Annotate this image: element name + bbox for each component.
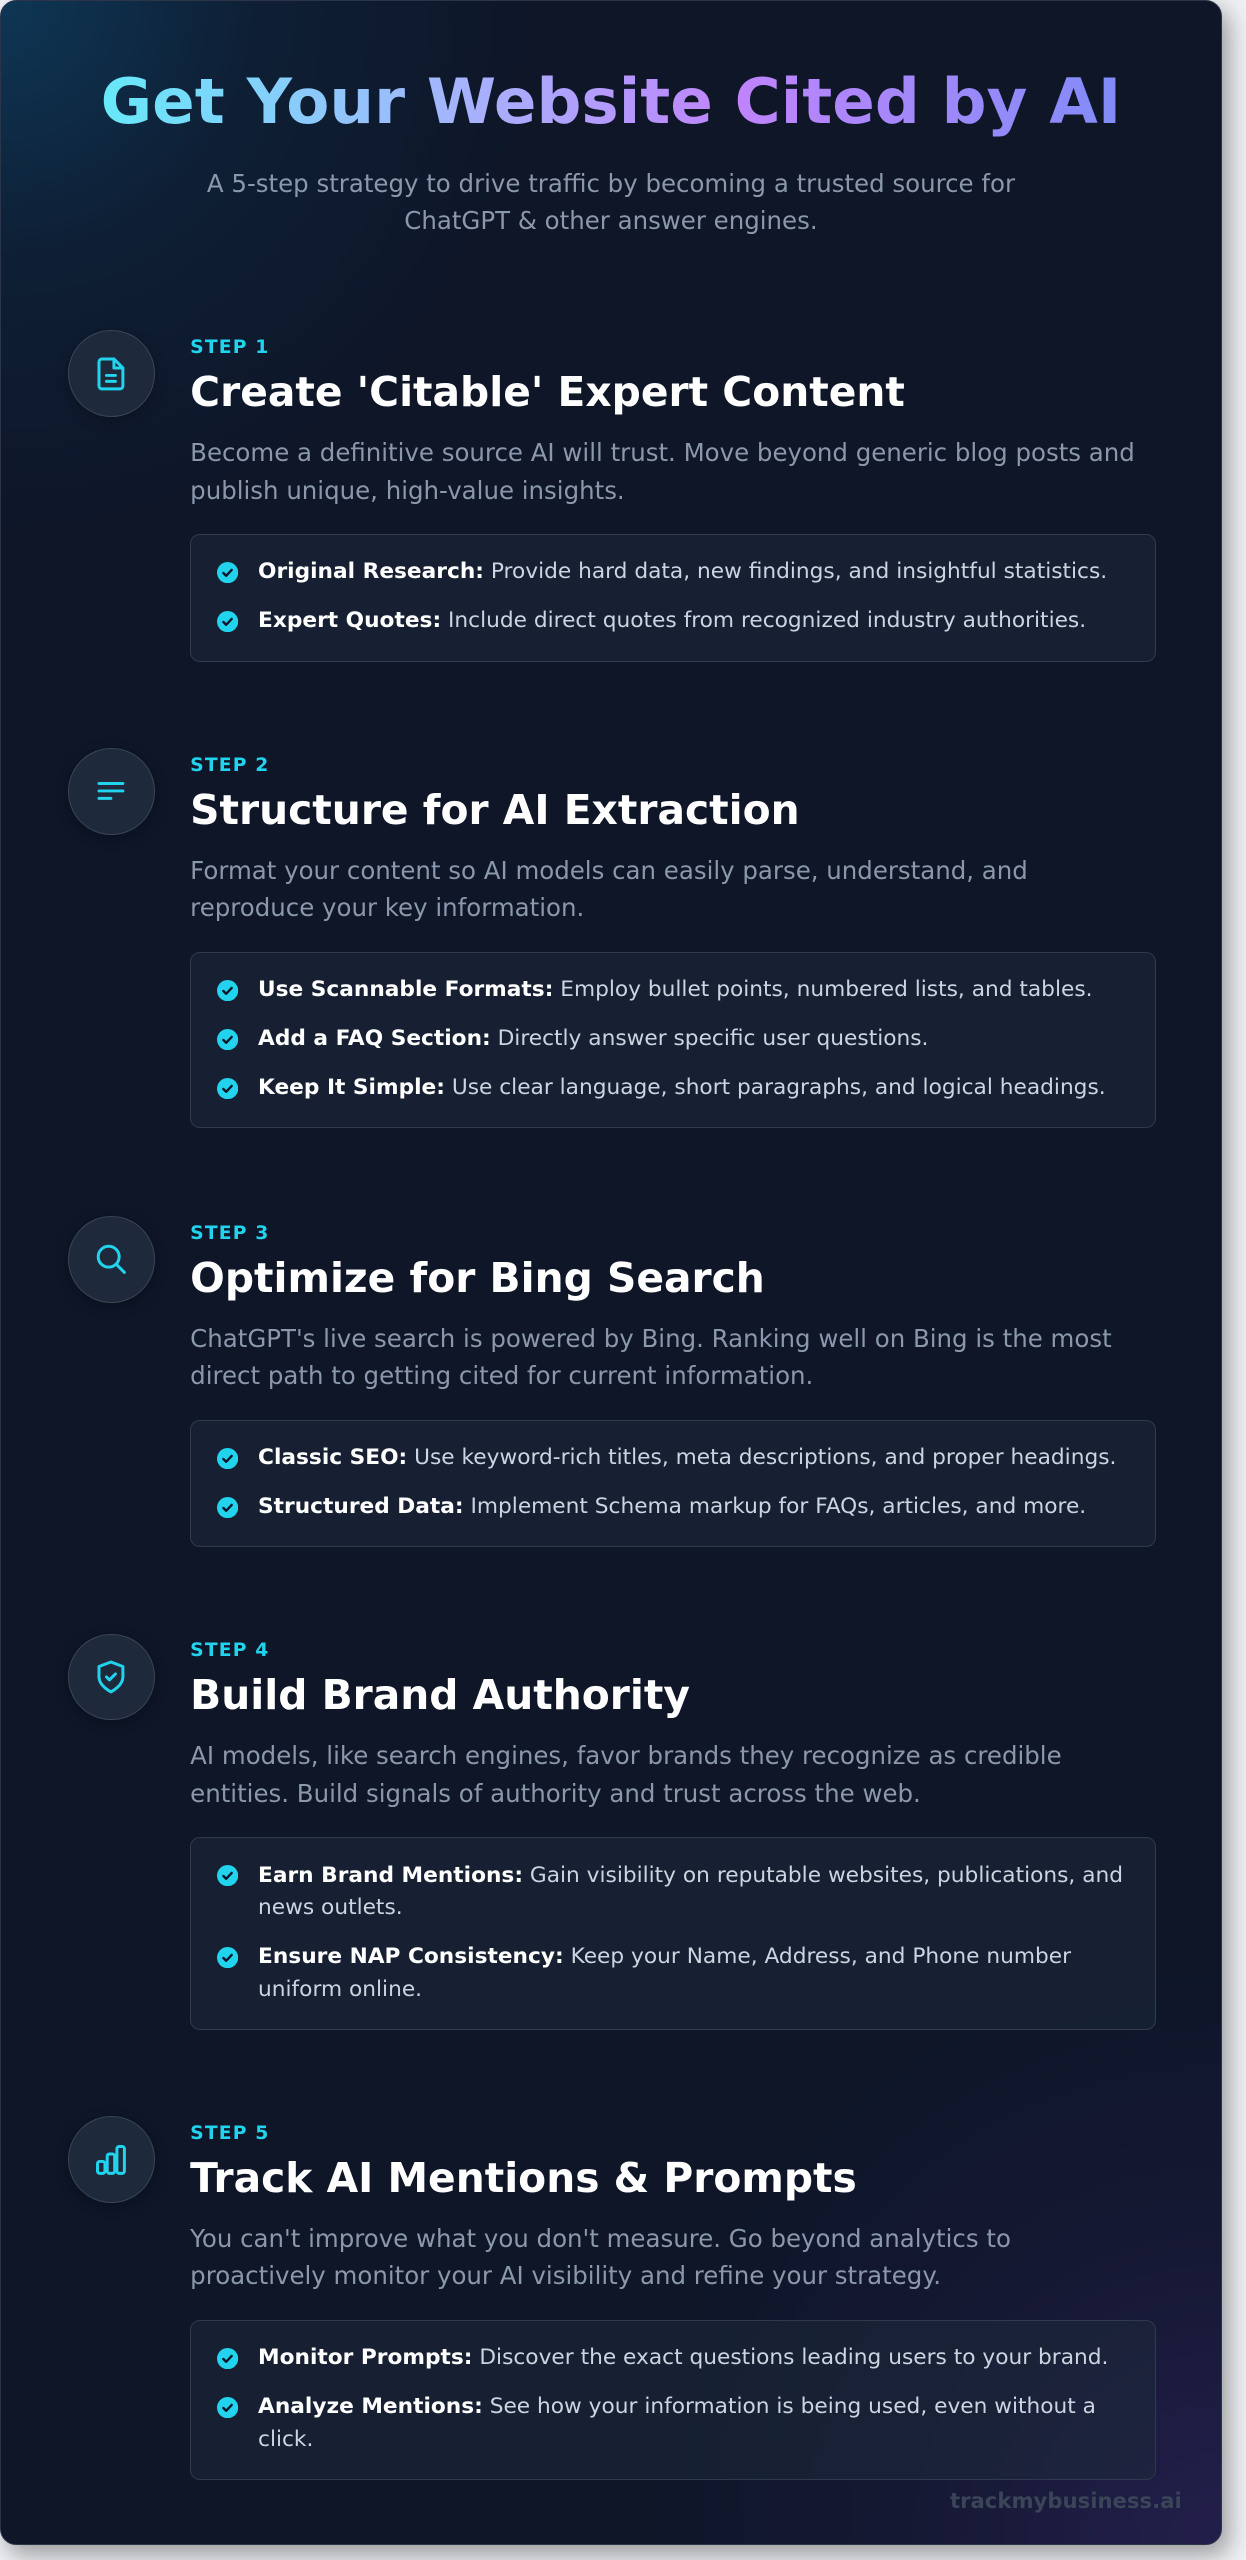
step 4 [68, 1634, 1156, 2030]
checklist box: Earn Brand Mentions: Gain visibility on reputable websites, publications, and [258, 1863, 1123, 1888]
description: ChatGPT's live search is powered by Bing. Ranking well on Bing is the most [190, 1324, 1112, 1353]
icon: bar chart [68, 2116, 155, 2203]
description: AI models, like search engines, favor brands they recognize as credible [190, 1741, 1062, 1770]
subtitle [207, 169, 1016, 235]
description: Format your content so AI models can easily parse, understand, and [190, 856, 1028, 884]
checklist box: uniform online. [258, 1977, 422, 2002]
heading: Optimize for Bing Search [190, 1254, 765, 1302]
checklist box [190, 534, 1156, 662]
step label: STEP 5 [190, 2123, 269, 2144]
title: Get Your Website Cited by AI [101, 65, 1121, 138]
step 2 [68, 748, 1156, 1128]
step 3 [68, 1216, 1156, 1547]
description: You can't improve what you don't measure. Go beyond analytics to [190, 2224, 1011, 2253]
description [190, 1324, 1112, 1390]
description: reproduce your key information. [190, 893, 584, 922]
description [190, 2224, 1011, 2290]
footer brand: trackmybusiness.ai [950, 2488, 1182, 2513]
description [190, 438, 1135, 504]
step label: STEP 3 [190, 1223, 269, 1244]
icon: lines [68, 748, 155, 835]
icon: document [68, 330, 155, 417]
icon: search [68, 1216, 155, 1303]
checklist box: Structured Data: Implement Schema markup for FAQs, articles, and more. [258, 1494, 1086, 1519]
step 5 [68, 2116, 1156, 2480]
description [190, 1741, 1062, 1808]
step label: STEP 4 [190, 1640, 269, 1661]
checklist box: Monitor Prompts: Discover the exact questions leading users to your brand. [258, 2345, 1108, 2370]
checklist box: Use Scannable Formats: Employ bullet points, numbered lists, and tables. [258, 977, 1093, 1002]
checklist box: Classic SEO: Use keyword-rich titles, meta descriptions, and proper headings. [258, 1445, 1116, 1470]
description: Become a definitive source AI will trust. Move beyond generic blog posts and [190, 438, 1135, 467]
icon: shield [68, 1634, 155, 1720]
subtitle: A 5-step strategy to drive traffic by becoming a trusted source for [207, 169, 1015, 198]
checklist box [190, 1420, 1156, 1547]
checklist box: Analyze Mentions: See how your information is being used, even without a [258, 2394, 1096, 2419]
checklist box: Ensure NAP Consistency: Keep your Name, Address, and Phone number [258, 1944, 1071, 1969]
heading: Build Brand Authority [190, 1671, 690, 1719]
heading: Track AI Mentions & Prompts [190, 2154, 857, 2202]
description: entities. Build signals of authority and trust across the web. [190, 1779, 921, 1808]
checklist box: Expert Quotes: Include direct quotes from recognized industry authorities. [258, 608, 1086, 633]
subtitle: ChatGPT & other answer engines. [404, 206, 818, 235]
step label: STEP 1 [190, 337, 269, 358]
checklist box: news outlets. [258, 1895, 403, 1920]
step 1 [68, 330, 1156, 662]
checklist box: Original Research: Provide hard data, new findings, and insightful statistics. [258, 559, 1107, 584]
checklist box [190, 1837, 1156, 2030]
checklist box [190, 2320, 1156, 2480]
description: proactively monitor your AI visibility and refine your strategy. [190, 2261, 941, 2290]
step label: STEP 2 [190, 755, 269, 776]
checklist box: Keep It Simple: Use clear language, short paragraphs, and logical headings. [258, 1075, 1106, 1100]
description: direct path to getting cited for current information. [190, 1361, 813, 1390]
description: publish unique, high-value insights. [190, 476, 625, 504]
description [190, 856, 1028, 922]
heading: Structure for AI Extraction [190, 786, 800, 834]
checklist box [190, 952, 1156, 1128]
heading: Create 'Citable' Expert Content [190, 368, 905, 416]
checklist box: Add a FAQ Section: Directly answer specific user questions. [258, 1026, 928, 1051]
checklist box: click. [258, 2427, 313, 2452]
